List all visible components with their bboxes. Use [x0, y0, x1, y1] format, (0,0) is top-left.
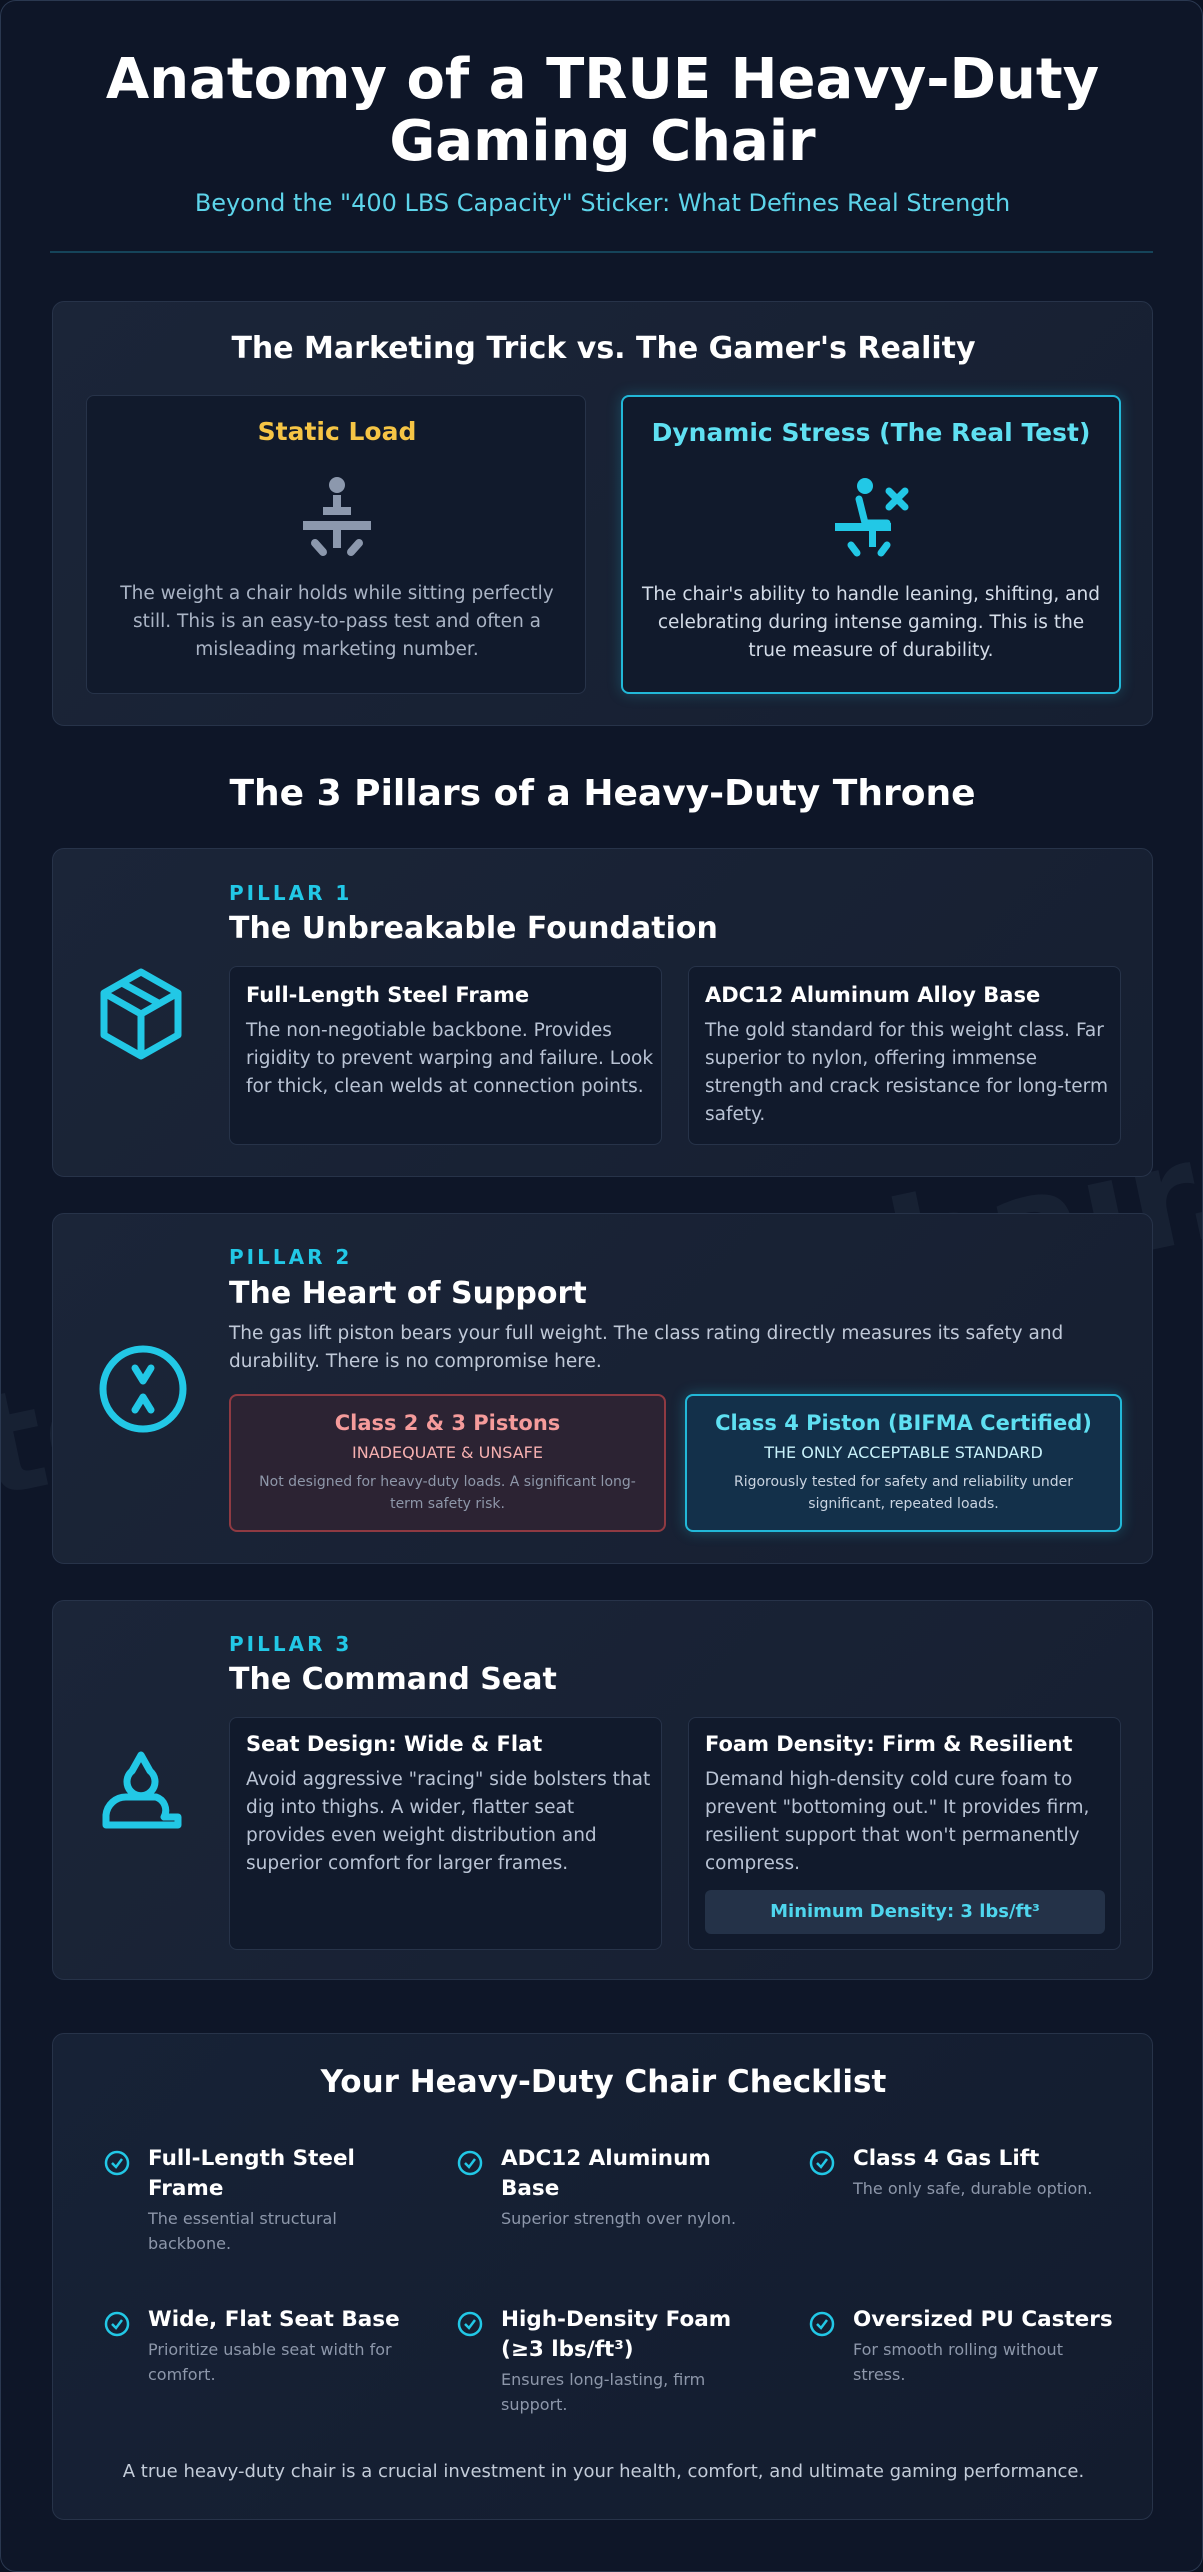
- item: wide seat: comfort.: [148, 2365, 216, 2384]
- static load text: still. This is an easy-to-pass test and often a: [133, 611, 541, 632]
- icon: dynamic person: [835, 478, 908, 556]
- box: static load: [86, 395, 586, 694]
- pillar 1 label: PILLAR 1: [229, 881, 352, 905]
- box: seat design: Avoid aggressive "racing" side bolsters that: [246, 1769, 650, 1790]
- icon: static sitting: [303, 477, 371, 556]
- box: steel frame: [229, 966, 662, 1145]
- pillar 1 heading: The Unbreakable Foundation: [229, 911, 718, 946]
- item: high density foam: High-Density Foam: [501, 2307, 731, 2332]
- item: casters: [810, 2307, 1113, 2384]
- heading: marketing trick: The Marketing Trick vs. The Gamer's Reality: [231, 331, 976, 366]
- dynamic stress text: true measure of durability.: [748, 640, 994, 661]
- item: aluminum base: [458, 2146, 736, 2228]
- box: class 2 & 3: Class 2 & 3 Pistons: [335, 1411, 560, 1435]
- pillar 2 label: PILLAR 2: [229, 1245, 352, 1269]
- box: steel frame: rigidity to prevent warping and failure. Look: [246, 1048, 653, 1069]
- box: class 4: Rigorously tested for safety and reliability under: [734, 1474, 1073, 1490]
- panel: marketing trick vs reality: [52, 301, 1153, 726]
- box: aluminum base: ADC12 Aluminum Alloy Base: [705, 983, 1040, 1007]
- box: seat design: dig into thighs. A wider, flatter seat: [246, 1797, 574, 1818]
- panel: pillar 1: [52, 848, 1153, 1177]
- dynamic stress text: The chair's ability to handle leaning, shifting, and: [642, 584, 1100, 605]
- item: class 4 gas lift: The only safe, durable option.: [853, 2179, 1092, 2198]
- item: high density foam: Ensures long-lasting, firm: [501, 2370, 705, 2389]
- box: class 2 & 3: Not designed for heavy-duty loads. A significant long-: [259, 1474, 636, 1490]
- box: dynamic stress: [621, 395, 1121, 694]
- box: class 4: significant, repeated loads.: [808, 1496, 999, 1512]
- box: steel frame: for thick, clean welds at connection points.: [246, 1076, 644, 1097]
- box: foam density: Foam Density: Firm & Resilient: [705, 1732, 1072, 1756]
- panel: checklist: [52, 2033, 1153, 2520]
- static load text: The weight a chair holds while sitting perfectly: [120, 583, 554, 604]
- box: foam density: [688, 1717, 1121, 1950]
- box: seat design: [229, 1717, 662, 1950]
- item: aluminum base: ADC12 Aluminum: [501, 2146, 711, 2171]
- box: seat design: provides even weight distribution and: [246, 1825, 597, 1846]
- box: foam density: prevent "bottoming out." It provides firm,: [705, 1797, 1089, 1818]
- box: class 4: [685, 1394, 1122, 1532]
- box: seat design: Seat Design: Wide & Flat: [246, 1732, 542, 1756]
- item: steel frame: backbone.: [148, 2234, 231, 2253]
- icon: piston: [100, 1346, 186, 1432]
- box: class 2 & 3: [229, 1394, 666, 1532]
- item: wide seat: Wide, Flat Seat Base: [148, 2307, 400, 2332]
- dynamic stress text: celebrating during intense gaming. This is the: [658, 612, 1084, 633]
- icon: cube: [100, 968, 182, 1060]
- footer statement: A true heavy-duty chair is a crucial investment in your health, comfort, and ultimate gaming performance.: [123, 2461, 1084, 2482]
- pillar 2 intro: [228, 1323, 1063, 1372]
- badge: minimum density: Minimum Density: 3 lbs/ft³: [770, 1901, 1040, 1922]
- item: class 4 gas lift: Class 4 Gas Lift: [853, 2146, 1039, 2171]
- box: class 4: Class 4 Piston (BIFMA Certified): [715, 1411, 1092, 1435]
- item: casters: Oversized PU Casters: [853, 2307, 1113, 2332]
- item: steel frame: The essential structural: [148, 2209, 337, 2228]
- pillar 2 heading: The Heart of Support: [229, 1276, 587, 1311]
- box: steel frame: Full-Length Steel Frame: [246, 983, 529, 1007]
- item: class 4 gas lift: [810, 2146, 1092, 2198]
- box: aluminum base: strength and crack resistance for long-term: [705, 1076, 1108, 1097]
- panel: pillar 3: [52, 1600, 1153, 1980]
- box: foam density: resilient support that won't permanently: [705, 1825, 1080, 1846]
- panel: pillar 2: [52, 1213, 1153, 1564]
- item: aluminum base: Superior strength over nylon.: [501, 2209, 736, 2228]
- box: class 4: THE ONLY ACCEPTABLE STANDARD: [764, 1443, 1043, 1462]
- item: steel frame: [104, 2146, 355, 2253]
- icon: seat: [102, 1752, 182, 1828]
- item: steel frame: Frame: [148, 2176, 223, 2201]
- item: high density foam: (≥3 lbs/ft³): [501, 2337, 634, 2362]
- dynamic stress title: Dynamic Stress (The Real Test): [652, 418, 1090, 447]
- title: [106, 47, 1099, 174]
- box: aluminum base: safety.: [705, 1104, 765, 1125]
- item: steel frame: Full-Length Steel: [148, 2146, 355, 2171]
- item: casters: stress.: [853, 2365, 905, 2384]
- item: aluminum base: Base: [501, 2176, 559, 2201]
- static load text: misleading marketing number.: [195, 639, 479, 660]
- item: casters: For smooth rolling without: [853, 2340, 1063, 2359]
- static load title: Static Load: [258, 417, 416, 446]
- title: Anatomy of a TRUE Heavy-Duty: [106, 47, 1099, 112]
- static load text: [120, 583, 554, 660]
- box: foam density: Demand high-density cold cure foam to: [705, 1769, 1072, 1790]
- checklist heading: Your Heavy-Duty Chair Checklist: [321, 2064, 886, 2100]
- pillar 2 intro: durability. There is no compromise here.: [229, 1351, 602, 1372]
- pillar 3 heading: The Command Seat: [229, 1662, 557, 1697]
- heading: 3 pillars: The 3 Pillars of a Heavy-Duty Throne: [229, 773, 976, 814]
- item: high density foam: [458, 2307, 731, 2414]
- title: Gaming Chair: [389, 109, 816, 174]
- box: aluminum base: The gold standard for this weight class. Far: [705, 1020, 1104, 1041]
- box: class 2 & 3: INADEQUATE & UNSAFE: [352, 1443, 543, 1462]
- badge: minimum density: [705, 1890, 1105, 1934]
- dynamic stress text: [642, 584, 1100, 661]
- item: high density foam: support.: [501, 2395, 568, 2414]
- box: class 2 & 3: term safety risk.: [390, 1496, 505, 1512]
- pillar 3 label: PILLAR 3: [229, 1632, 352, 1656]
- subtitle: Beyond the "400 LBS Capacity" Sticker: What Defines Real Strength: [195, 189, 1010, 217]
- box: seat design: superior comfort for larger frames.: [246, 1853, 568, 1874]
- item: wide seat: [104, 2307, 400, 2384]
- box: aluminum base: superior to nylon, offering immense: [705, 1048, 1037, 1069]
- box: steel frame: The non-negotiable backbone. Provides: [246, 1020, 612, 1041]
- box: aluminum base: [688, 966, 1121, 1145]
- box: foam density: compress.: [705, 1853, 800, 1874]
- item: wide seat: Prioritize usable seat width for: [148, 2340, 392, 2359]
- pillar 2 intro: The gas lift piston bears your full weight. The class rating directly measures its safety and: [229, 1323, 1063, 1344]
